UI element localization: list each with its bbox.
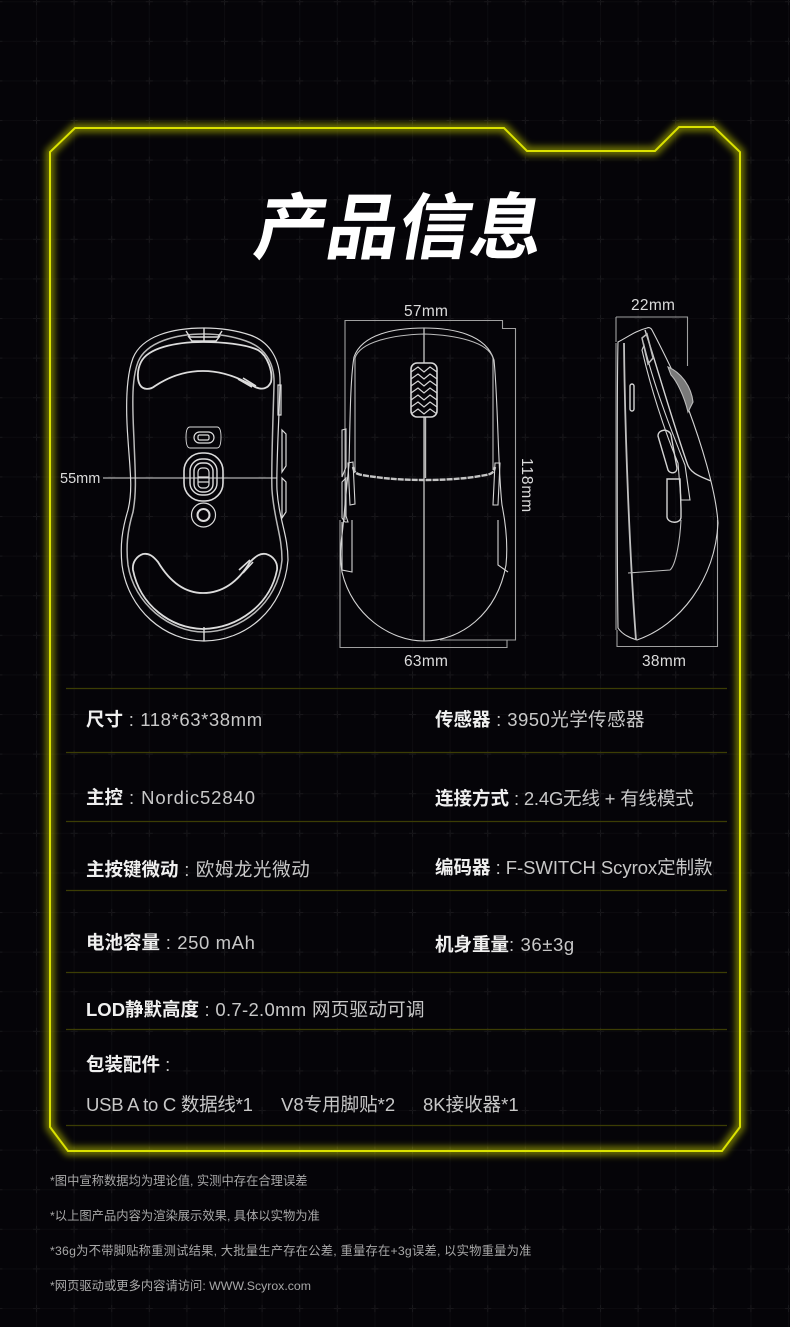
dimension labels: [60, 297, 686, 670]
spec: main switch: 主按键微动 : 欧姆龙光微动: [86, 859, 310, 880]
neon panel frame: [50, 127, 740, 1151]
dimension labels: 118mm: [518, 458, 535, 513]
mouse side view: [616, 317, 718, 646]
dimension labels: 38mm: [642, 653, 686, 670]
mouse top view: [340, 320, 516, 648]
spec: package contents: 8K接收器*1: [423, 1094, 519, 1115]
spec: encoder: 编码器 : F-SWITCH Scyrox定制款: [435, 857, 712, 878]
dimension labels: 55mm: [60, 471, 100, 487]
spec: sensor: 传感器 : 3950光学传感器: [435, 709, 645, 730]
footnote 4: *网页驱动或更多内容请访问: WWW.Scyrox.com: [50, 1279, 311, 1293]
spec: package contents: USB A to C 数据线*1: [86, 1094, 253, 1115]
dimension labels: 63mm: [404, 653, 448, 670]
spec: package heading: 包装配件 :: [86, 1054, 170, 1075]
title: 产品信息: [248, 169, 554, 274]
dimension labels: 57mm: [404, 303, 448, 320]
spec: size: 尺寸 : 118*63*38mm: [86, 709, 263, 730]
spec: battery: 电池容量 : 250 mAh: [86, 932, 255, 953]
spec: LOD: LOD静默高度 : 0.7-2.0mm 网页驱动可调: [86, 999, 425, 1020]
spec: package contents: [86, 1094, 519, 1115]
mouse bottom view: [121, 328, 288, 641]
dimension labels: 22mm: [631, 297, 675, 314]
footnote 3: *36g为不带脚贴称重测试结果, 大批量生产存在公差, 重量存在+3g误差, 以实物重量为准: [50, 1244, 532, 1258]
spec: controller: 主控 : Nordic52840: [86, 787, 256, 808]
spec: weight: 机身重量: 36±3g: [435, 934, 575, 955]
footnote 2: *以上图产品内容为渲染展示效果, 具体以实物为准: [50, 1209, 320, 1223]
spec: connection: 连接方式 : 2.4G无线 + 有线模式: [435, 788, 693, 809]
spec: package contents: V8专用脚贴*2: [281, 1094, 395, 1115]
footnote 1: *图中宣称数据均为理论值, 实测中存在合理误差: [50, 1174, 308, 1188]
